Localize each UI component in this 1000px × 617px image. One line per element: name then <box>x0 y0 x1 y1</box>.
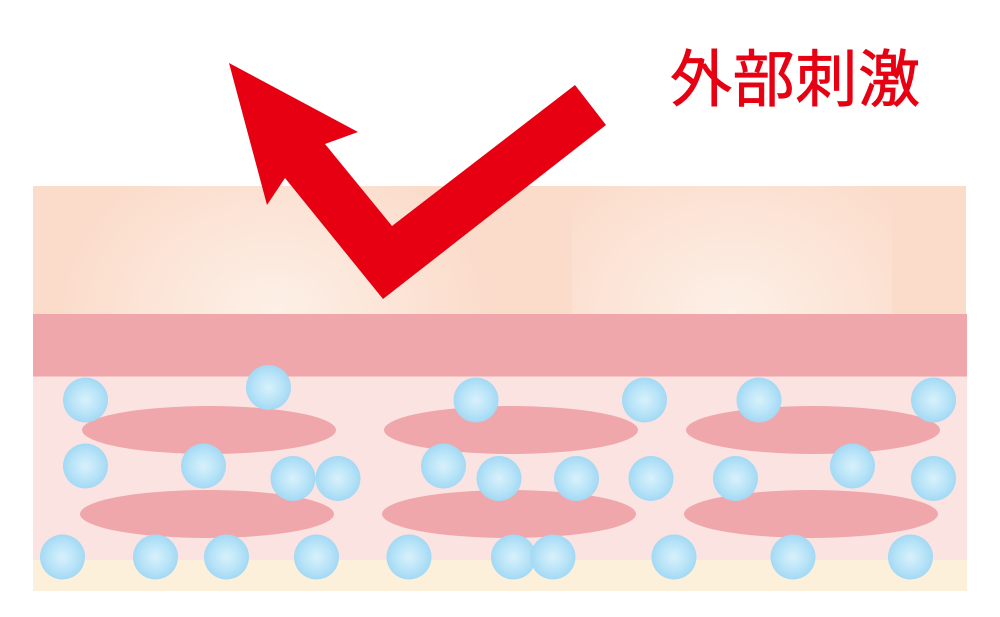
panel: cream base layer <box>33 560 967 591</box>
skin cell left <box>33 186 533 314</box>
title: external stimulus: 外部刺激 <box>670 46 920 115</box>
blue moisture spheres <box>40 365 956 580</box>
panel: dark pink band <box>33 314 967 376</box>
arrow: stimulus bouncing off skin <box>229 63 606 299</box>
panel: light pink layer <box>33 376 967 560</box>
panel: upper skin layer <box>33 186 966 314</box>
skin cell right <box>572 186 892 314</box>
pink oval cells <box>80 406 940 538</box>
